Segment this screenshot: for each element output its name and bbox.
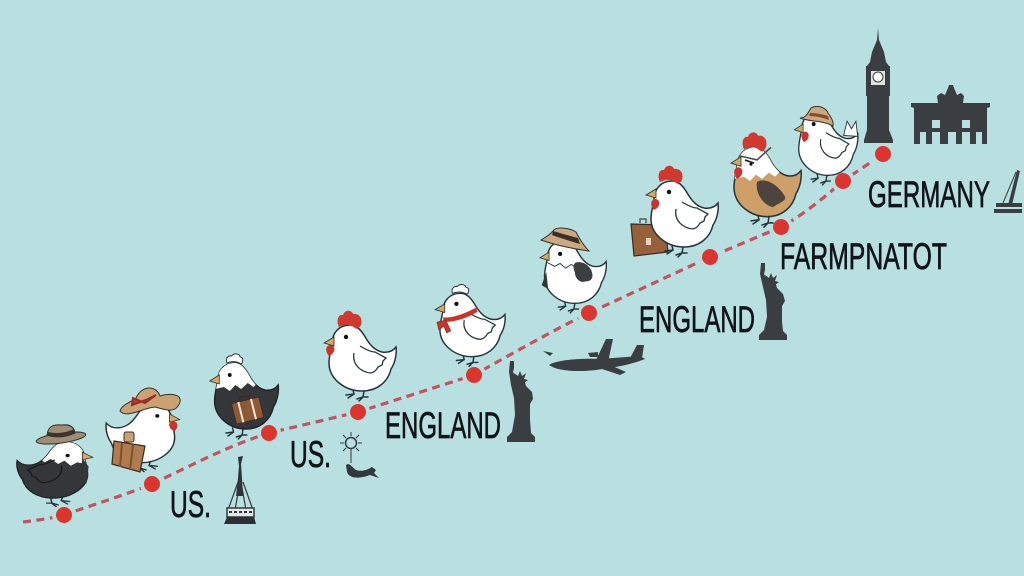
chicken 1: dark with hat: [16, 442, 94, 508]
icon: statue of liberty first: [507, 361, 535, 442]
label: ENGLAND first: ENGLAND: [385, 405, 501, 446]
chicken 9: white with small hat: [794, 113, 858, 185]
sun hat: [120, 388, 180, 414]
chicken 5: white with red scarf: [435, 285, 505, 366]
label: ENGLAND second: ENGLAND: [639, 299, 755, 340]
fedora: [541, 228, 589, 251]
icon: sun on pole: [340, 432, 362, 463]
route stops: [52, 142, 895, 527]
chicken 6: white with fedora: [540, 241, 606, 313]
icon: small bird silhouette: [346, 464, 379, 478]
chicken 8: brown with glasses: [725, 131, 801, 227]
icon: airplane: [543, 339, 645, 375]
label: FARMPNATOT: FARMPNATOT: [780, 236, 947, 277]
icon: crane: [994, 170, 1022, 213]
suitcase on chicken 3: [231, 393, 264, 424]
label: US. first: US.: [170, 484, 211, 525]
icon: tower landmark: [224, 456, 256, 524]
icon: statue of liberty second: [759, 263, 787, 340]
hat on chicken 1: [36, 425, 86, 446]
icon: Big Ben: [864, 28, 893, 143]
suitcase brown: [631, 219, 668, 256]
chicken 7: white red comb with suitcase: [646, 166, 718, 257]
chicken 4: white red comb: [324, 311, 396, 401]
icon: Brandenburg Gate: [911, 85, 990, 144]
label: US. second: US.: [290, 434, 331, 475]
dashed route line: [23, 154, 883, 522]
chicken 3: dark body white head: [209, 353, 280, 440]
chicken 2: white with sun hat and suitcase: [106, 403, 180, 472]
small hat: [800, 106, 833, 126]
suitcase tan: [112, 432, 145, 472]
